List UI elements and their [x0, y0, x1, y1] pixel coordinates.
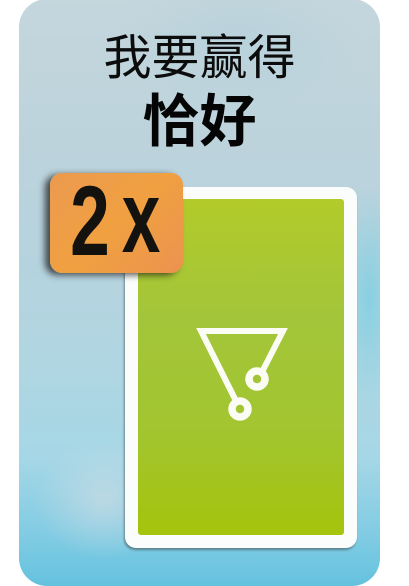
heading: line 2: 恰好 [142, 90, 256, 154]
badge text: x: x [122, 160, 160, 274]
badge: orange 2x [50, 173, 183, 273]
card: white frame with green face [125, 187, 357, 548]
green face [138, 199, 344, 535]
icon: triangle with two circles [196, 328, 288, 421]
badge text: 2: 2 [70, 165, 110, 276]
heading: line 1: 我要赢得 [103, 32, 296, 85]
